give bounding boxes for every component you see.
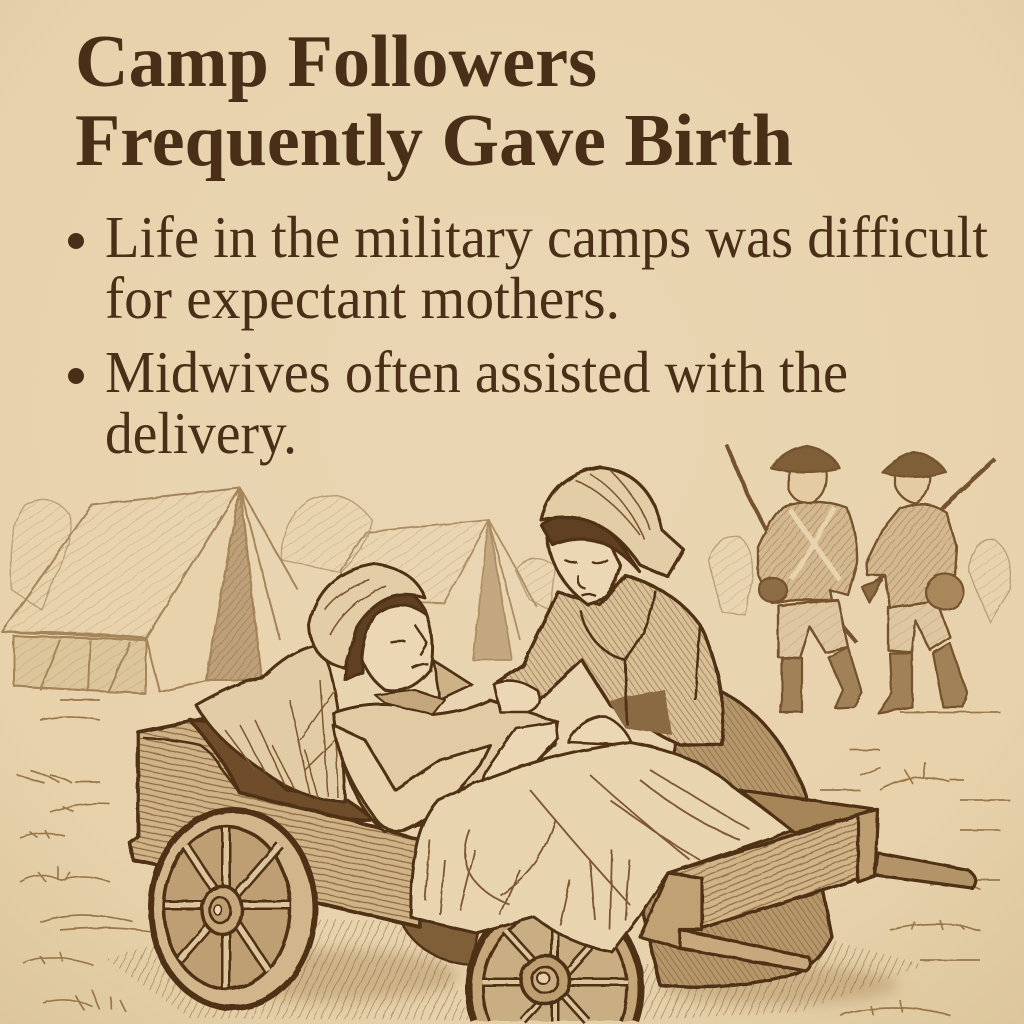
soldier left: [727, 445, 862, 712]
ground hatch left: [107, 920, 470, 1020]
bullet 1: [68, 204, 989, 331]
midwife bodice: [494, 467, 723, 745]
midwife hair: [541, 514, 640, 572]
midwife face: [547, 520, 620, 605]
right musket: [870, 459, 995, 590]
soldier right: [862, 452, 995, 713]
title: [75, 21, 793, 182]
ground blur: [200, 949, 900, 1005]
far pillow: [433, 660, 472, 700]
background trees: [11, 496, 1011, 622]
midwife skirt: [640, 680, 832, 987]
tent door: [206, 488, 262, 680]
mother cap: [309, 564, 425, 668]
mother arm: [333, 725, 490, 831]
bullet list: [68, 204, 989, 466]
blanket: [411, 742, 794, 952]
bullet 2: [68, 339, 848, 466]
bullet 2: Midwives often assisted with the: [105, 339, 848, 405]
left soldier hand: [759, 578, 787, 602]
midwife cap: [541, 467, 684, 577]
mother features: [390, 625, 428, 668]
mother hair: [345, 589, 427, 680]
wheel: front: [469, 897, 641, 1021]
corner post: [858, 810, 878, 882]
ground shading: [107, 920, 925, 1020]
small tent door: [473, 520, 512, 660]
mother torso: [333, 700, 558, 832]
bullet 1: for expectant mothers.: [105, 265, 620, 331]
title: Camp Followers: [75, 21, 597, 103]
bullet 2: delivery.: [105, 400, 297, 466]
right soldier coat: [866, 504, 957, 608]
title: Frequently Gave Birth: [75, 100, 793, 182]
tent side wall: [14, 636, 146, 694]
mother and midwife hands: [482, 681, 632, 809]
mother collar: [375, 690, 445, 715]
mother: [309, 564, 558, 832]
left soldier head: [789, 470, 826, 502]
midwife bodice seam: [580, 590, 700, 725]
far rail: [740, 790, 878, 832]
wagon rail edge: [143, 738, 240, 793]
lower rail: [680, 930, 811, 971]
left soldier legs: [780, 647, 862, 712]
shadow under wagon: [400, 920, 480, 965]
wagon left side: [130, 718, 420, 927]
front post: [640, 873, 702, 948]
wagon right side: [640, 790, 975, 971]
pillow: [196, 645, 345, 802]
ground hatch right: [640, 940, 925, 1020]
near rail: [668, 810, 875, 928]
bullet 1: Life in the military camps was difficult: [105, 204, 989, 270]
left musket: [727, 445, 857, 643]
midwife waist shading: [608, 690, 672, 735]
tent: large: [2, 488, 298, 694]
tent: small: [340, 520, 537, 660]
wagon dark interior: [190, 720, 375, 820]
right soldier satchel: [926, 574, 964, 610]
illustration: [2, 445, 1011, 1021]
wagon handle: [875, 853, 975, 888]
left soldier coat: [758, 502, 857, 603]
mother face: [358, 602, 433, 691]
right soldier head: [895, 473, 930, 503]
midwife features: [565, 560, 608, 596]
right soldier legs: [878, 643, 967, 713]
grass tufts: [17, 700, 1010, 1015]
wheel: left: [151, 810, 315, 1008]
